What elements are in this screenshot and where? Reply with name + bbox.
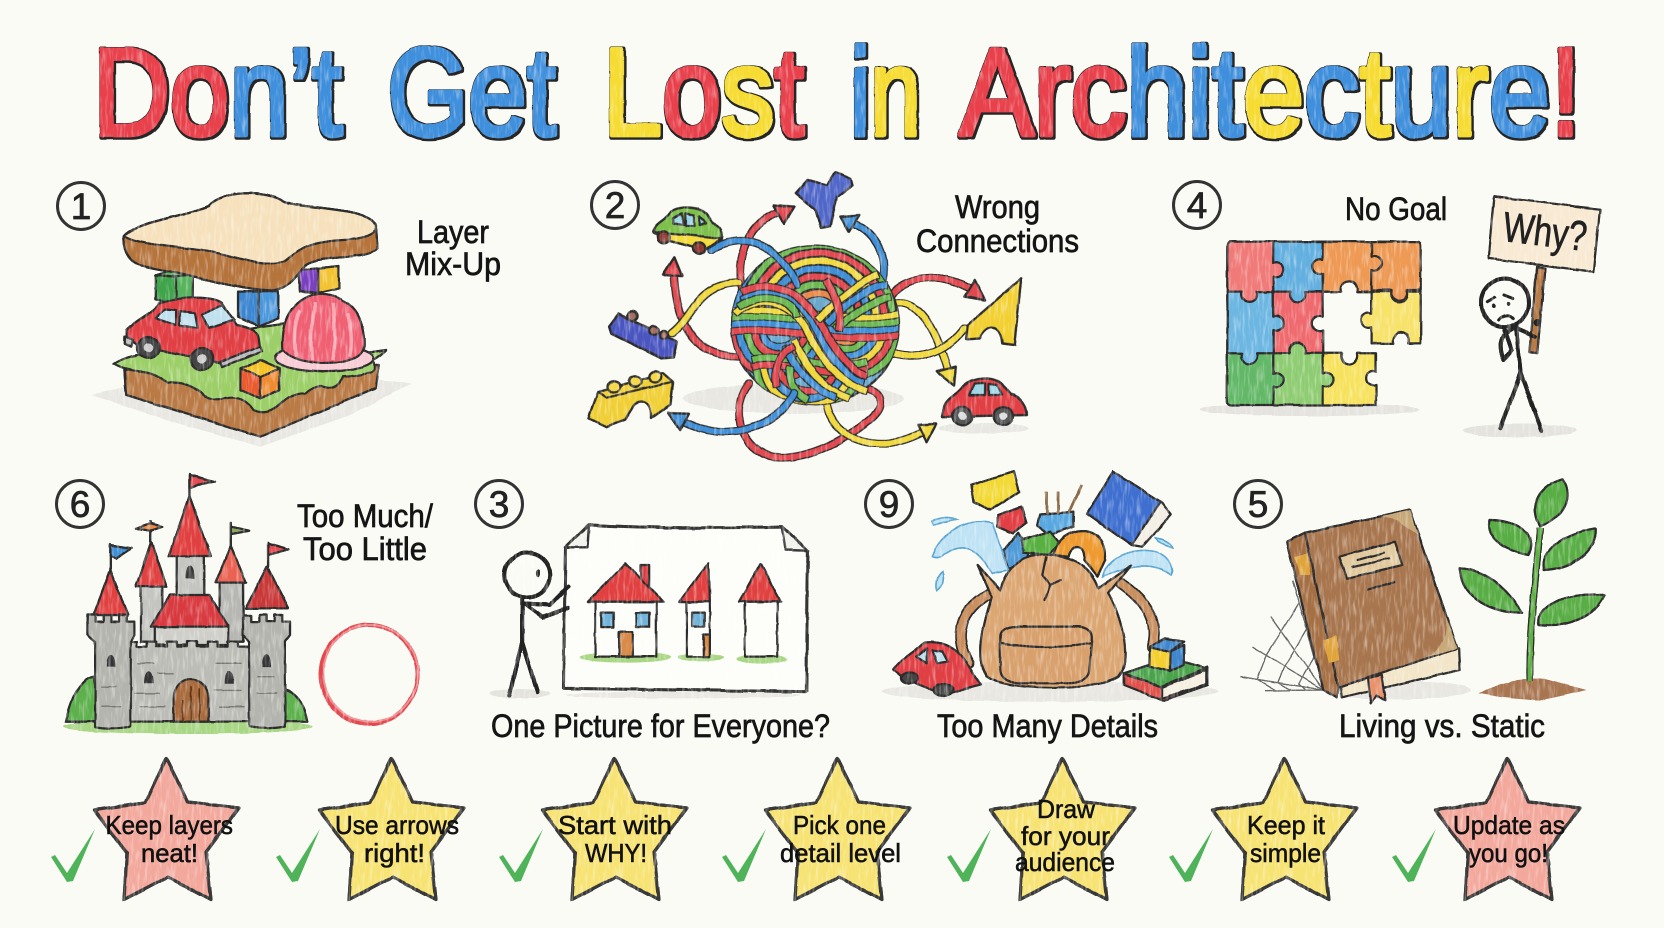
arrows behind the ball [663, 205, 985, 458]
number badge 4: 4 [1187, 185, 1207, 226]
sign text: why?: Why? [1501, 203, 1590, 260]
title: Don’t [93, 24, 342, 162]
heading: wrong connections: Wrong [955, 189, 1040, 225]
illustration: puzzle with missing pieces [1200, 197, 1600, 437]
caption: living vs. static: Living vs. Static [1339, 708, 1545, 744]
title: Lost [603, 24, 804, 162]
caption: one picture for everyone: One Picture for Everyone? [491, 708, 830, 744]
yellow arrow block [966, 278, 1021, 345]
tip 1: keep layers neat: Keep layers [106, 810, 233, 840]
tip 3: start with why: Start with [558, 810, 672, 840]
illustration: stick figure with house drawing [489, 525, 808, 698]
purple brick [609, 311, 677, 358]
tip 7: update as you go: Update as [1453, 810, 1565, 840]
yellow lego [589, 371, 673, 427]
tip 5: draw for your audience [947, 758, 1135, 900]
tip 2: use arrows right: right! [364, 838, 425, 868]
illustration: castle and empty circle [63, 474, 418, 734]
panel: 4 no goal [1174, 182, 1600, 437]
title: Get [387, 24, 556, 162]
number badge 4 [1174, 182, 1220, 228]
tip 1: keep layers neat: neat! [141, 838, 198, 868]
tip 5: draw for your audience: for your [1021, 821, 1110, 851]
red car [942, 379, 1026, 425]
panel: 1 layer mix-up [58, 182, 501, 447]
title: in [850, 24, 921, 162]
tips row: seven stars with ticks [51, 758, 1580, 900]
illustration: tangled yarn ball with arrows [589, 172, 1028, 458]
tip 3: start with why [499, 758, 687, 900]
tip 5: draw for your audience: Draw [1037, 794, 1095, 824]
number badge 6 [56, 480, 104, 528]
yarn ball [680, 237, 904, 432]
heading: wrong connections: Connections [916, 223, 1079, 259]
illustration: overflowing backpack [882, 472, 1218, 702]
panel: 6 too much / too little [56, 474, 433, 734]
tip 4: pick one detail level: Pick one [793, 810, 886, 840]
number badge 3 [476, 480, 522, 528]
number badge 1: 1 [71, 186, 91, 227]
tip 4: pick one detail level: detail level [780, 838, 901, 868]
tip 2: use arrows right [276, 758, 464, 900]
tip 3: start with why: WHY! [585, 838, 647, 868]
number badge 5 [1234, 480, 1282, 528]
tip 4: pick one detail level [722, 758, 910, 900]
tip 6: keep it simple [1169, 758, 1357, 900]
number badge 5: 5 [1248, 484, 1268, 525]
panel: 3 one picture for everyone [476, 480, 830, 744]
heading: too much / too little: Too Little [303, 531, 427, 567]
blue block [796, 172, 852, 228]
number badge 3: 3 [489, 484, 509, 525]
heading: no goal: No Goal [1345, 191, 1447, 227]
tip 2: use arrows right: Use arrows [335, 810, 459, 840]
heading: wrong connections [916, 189, 1079, 259]
illustration: messy sandwich [92, 193, 412, 447]
number badge 2: 2 [605, 185, 625, 226]
tip 6: keep it simple: Keep it [1247, 810, 1326, 840]
panel: 2 wrong connections [589, 172, 1079, 458]
tip 1: keep layers neat [51, 758, 239, 900]
title [93, 24, 1581, 162]
title: Architecture! [960, 24, 1581, 162]
green car [653, 208, 722, 254]
tip 7: update as you go: you go! [1469, 838, 1548, 868]
number badge 1 [58, 182, 104, 230]
number badge 9 [866, 480, 912, 528]
panel: 5 living vs static [1234, 479, 1605, 744]
number badge 6: 6 [70, 484, 90, 525]
heading: too much / too little: Too Much/ [297, 498, 433, 534]
heading: layer mix-up: Layer [417, 214, 489, 250]
heading: too much / too little [297, 498, 433, 567]
illustration: dusty book and growing plant [1240, 479, 1605, 703]
tip 7: update as you go [1392, 758, 1580, 900]
caption: too many details: Too Many Details [937, 708, 1158, 744]
heading: layer mix-up [405, 214, 501, 282]
panel: 9 too many details [866, 472, 1218, 744]
number badge 9: 9 [879, 484, 899, 525]
tip 6: keep it simple: simple [1250, 838, 1321, 868]
tip 5: draw for your audience: audience [1015, 847, 1115, 877]
number badge 2 [592, 182, 638, 228]
heading: layer mix-up: Mix-Up [405, 246, 501, 282]
